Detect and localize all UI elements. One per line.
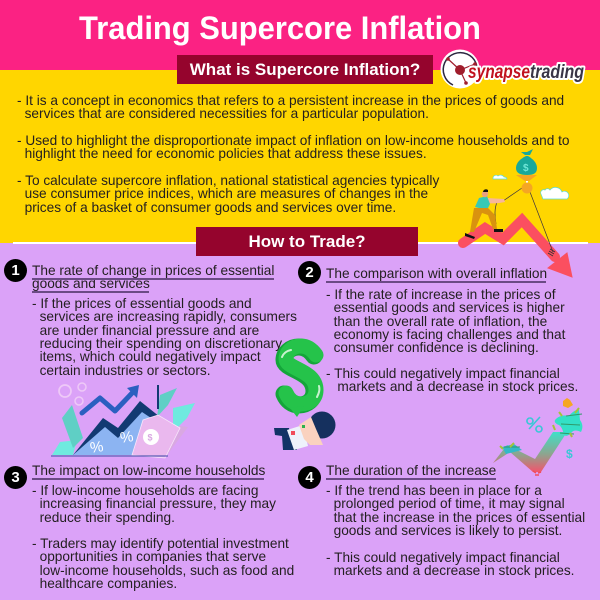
logo: synapsetrading: synapse: [468, 62, 530, 83]
badge 1: 1: [11, 262, 20, 279]
badge 3: [4, 466, 27, 489]
heading: how to trade: How to Trade?: [248, 232, 366, 251]
title: Trading Supercore Inflation: [79, 10, 481, 46]
text block 3: - If low-income households are facing increasing financial pressure, they may reduce their spending.: [32, 483, 276, 525]
badge 4: [298, 466, 321, 489]
heading 2: The comparison with overall inflation: [326, 266, 547, 281]
text block 4: - If the trend has been in place for a prolonged period of time, it may signal that the increase in the prices of essential goods and services is likely to persist.: [326, 483, 585, 538]
text block 1: - If the prices of essential goods and services are increasing rapidly, consumers are under financial pressure and are reducing their spending on discretionary items, which could negatively impact certain industries or sectors.: [32, 296, 297, 378]
text block 4b: - This could negatively impact financial markets and a decrease in stock prices.: [326, 550, 574, 578]
heading: what is supercore inflation: [177, 55, 433, 84]
illustration: trader pulling falling arrow: $: [523, 163, 529, 174]
yellow section panel: [0, 70, 600, 243]
text block: definition: - It is a concept in economics that refers to a persistent increase in the prices of goods and services that are considered necessities for a particular population.: [17, 93, 564, 121]
heading 1: The rate of change in prices of essential goods and services: [32, 263, 274, 291]
badge 4: 4: [305, 469, 314, 486]
badge 2: [298, 261, 321, 284]
badge 2: 2: [305, 264, 314, 281]
text block 3b: - Traders may identify potential investment opportunities in companies that serve low-income households, such as food and healthcare companies.: [32, 536, 294, 591]
badge 3: 3: [11, 469, 20, 486]
text block 2: - If the rate of increase in the prices of essential goods and services is higher than the overall rate of inflation, the economy is facing challenges and that consumer confidence is declining.: [326, 287, 565, 355]
logo: synapsetrading: [440, 50, 586, 88]
heading: how to trade: [196, 227, 418, 256]
illustration: growth chart with money: %: [89, 438, 105, 457]
pink header band: [0, 0, 600, 70]
badge 1: [4, 259, 27, 282]
text block 2b: - This could negatively impact financial markets and a decrease in stock prices.: [326, 366, 578, 394]
text block: calculation: - To calculate supercore inflation, national statistical agencies typically use consumer price indices, which are measures of changes in the prices of a basket of consumer goods and services over time.: [17, 173, 439, 215]
illustration: v-shaped plant arrow: $: [566, 447, 573, 461]
heading: what is supercore inflation: What is Supercore Inflation?: [190, 60, 420, 79]
illustration: growth chart with money: %: [119, 428, 135, 447]
text block: usage: - Used to highlight the disproportionate impact of inflation on low-income households and to highlight the need for economic policies that address these issues.: [17, 133, 570, 161]
white divider: [13, 242, 196, 244]
heading 4: The duration of the increase: [326, 463, 496, 478]
illustration: growth chart with money: $: [148, 432, 153, 442]
heading 3: The impact on low-income households: [32, 463, 265, 478]
